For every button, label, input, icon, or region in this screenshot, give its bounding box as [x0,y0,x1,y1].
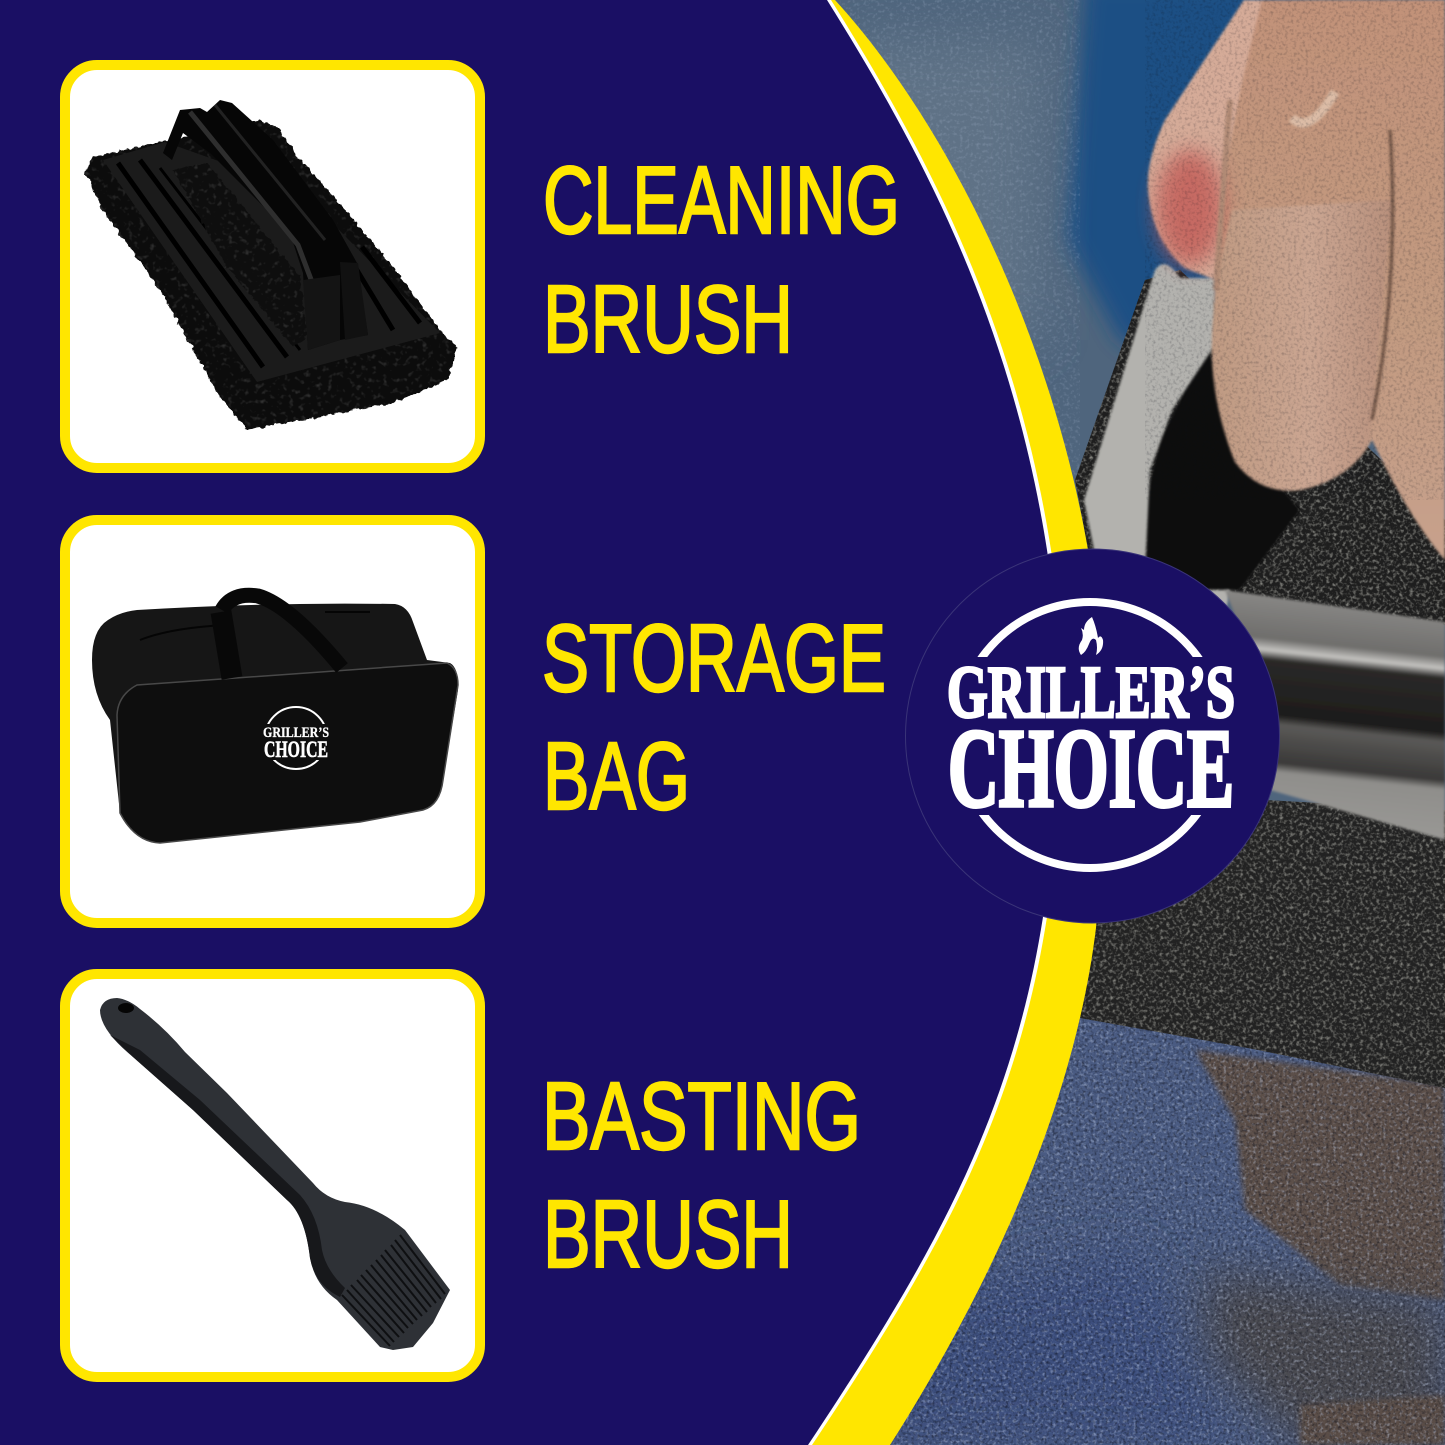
panel: cleaning brush [65,65,480,468]
logo badge: Griller's Choice [906,549,1280,923]
heading: storage bag: BAG [543,723,690,830]
icon: flame [1079,617,1103,655]
card frame [65,520,480,923]
heading: cleaning brush: CLEANING [543,147,900,254]
black handle recess [1146,345,1300,590]
logo ring [957,602,1223,868]
heading: basting brush: BRUSH [543,1181,793,1288]
bag logo: GRILLER’S [263,725,329,741]
hand [1148,0,1445,560]
icon: basting brush product [100,998,450,1350]
yellow curved band [700,0,1100,1445]
navy panel [0,0,1058,1445]
panel: storage bag [65,520,480,923]
denim below the pad [997,1018,1346,1445]
logo wordmark: GRILLER’S [947,652,1235,734]
heading: basting brush [542,1063,861,1288]
heading: cleaning brush: BRUSH [543,266,793,373]
lower scrub pad [1080,790,1445,1088]
heading: basting brush: BASTING [542,1063,861,1170]
card frame [65,974,480,1377]
icon: storage bag product [92,595,458,843]
heading: storage bag [542,605,886,830]
bag logo: CHOICE [264,737,328,762]
bag logo [262,707,330,769]
panel: basting brush [65,974,480,1377]
bag handles [221,595,342,678]
photo: hand using the cleaning brush [800,0,1445,1445]
white edge line [600,0,1062,1445]
icon: cleaning brush product [85,100,457,430]
heading: cleaning brush [543,147,900,373]
upper scrub pad [1075,270,1445,625]
brush handle frame [1084,264,1230,640]
brush handle ribs [1225,590,1445,840]
card frame [65,65,480,468]
logo badge: Griller's Choice: CHOICE [948,707,1234,831]
heading: storage bag: STORAGE [542,605,886,712]
